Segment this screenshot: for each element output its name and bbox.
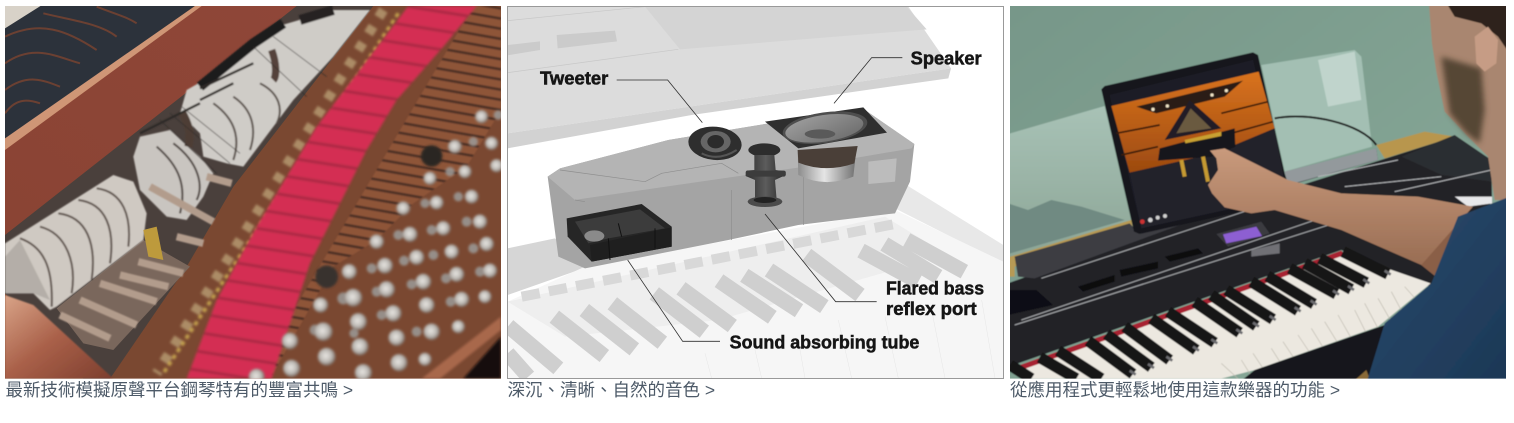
panel: speaker diagram	[507, 6, 1004, 400]
leader lines	[617, 58, 902, 341]
panel: piano resonance	[5, 6, 501, 400]
dark strings area	[5, 6, 194, 138]
tuning pins	[249, 110, 503, 385]
hammers	[5, 10, 370, 310]
sound absorbing tube	[567, 204, 672, 262]
wall	[1008, 0, 1514, 383]
plate background	[0, 0, 505, 383]
agraffe row	[157, 10, 398, 373]
copper beam	[5, 6, 297, 235]
display	[1216, 222, 1270, 247]
ghost keyboard top	[508, 7, 951, 148]
strings area	[253, 6, 501, 379]
caption: app: 從應用程式更輕鬆地使用這款樂器的功能 >	[1010, 380, 1340, 400]
ghost keys	[508, 180, 1003, 378]
copper lower corner	[5, 295, 113, 379]
red felt band	[187, 6, 477, 379]
hammer shanks	[60, 177, 232, 338]
black and white keys	[1008, 251, 1431, 383]
tweeter	[688, 126, 742, 160]
label: Tweeter: Tweeter	[540, 68, 608, 88]
label: Flared bass reflex port: reflex port	[886, 299, 977, 319]
caption: tone: 深沉、清晰、自然的音色 >	[508, 380, 715, 400]
label: Flared bass reflex port: Flared bass	[886, 278, 984, 298]
flared bass reflex port	[746, 143, 786, 207]
on-screen grand piano	[1158, 100, 1235, 182]
photo: man using tablet at digital piano	[1010, 6, 1506, 379]
label: Speaker: Speaker	[911, 49, 982, 69]
hammers shadow area	[5, 6, 373, 379]
wood shelf	[1008, 132, 1455, 277]
man head	[1428, 6, 1506, 200]
caption: resonance: 最新技術模擬原聲平台鋼琴特有的豐富共鳴 >	[6, 380, 353, 400]
keyboard body	[1008, 135, 1492, 367]
diagram: speaker system	[507, 6, 1004, 379]
arm and pointing hand	[1208, 148, 1473, 278]
denim shirt	[1366, 195, 1514, 383]
label: Sound absorbing tube: Sound absorbing tube	[730, 332, 919, 352]
speaker box	[548, 110, 914, 268]
photo: grand piano interior	[5, 6, 501, 379]
music rest glass	[1008, 50, 1376, 257]
speaker	[765, 107, 887, 182]
panel: app control photo	[1010, 6, 1506, 400]
tablet	[1101, 52, 1293, 234]
